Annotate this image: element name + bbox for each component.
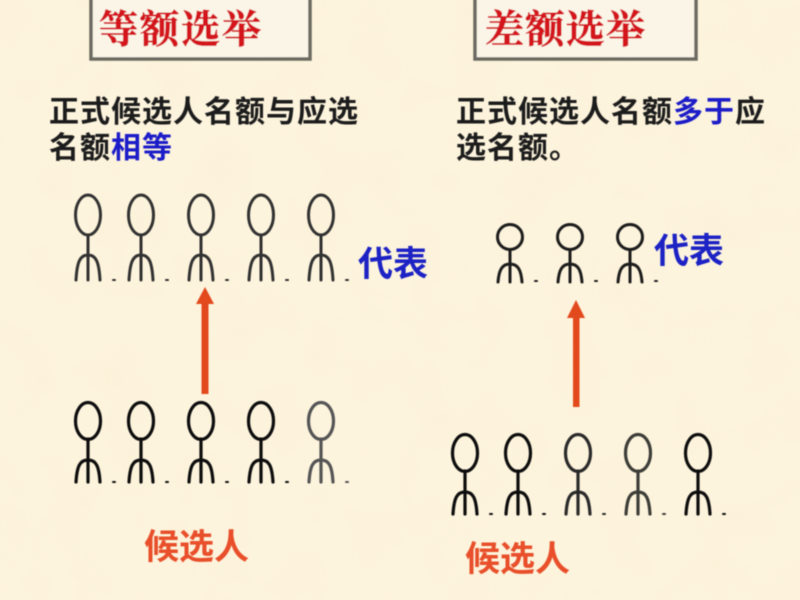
label: 代表: 代表: [358, 245, 428, 284]
arrow: selection upward: [567, 300, 585, 407]
arrow: selection upward: [196, 287, 214, 394]
description text: 正式候选人名额与应选: [49, 96, 359, 129]
heading box: 差额选举: [475, 0, 696, 59]
panel: equal-candidate election: [49, 0, 428, 567]
label: 候选人: 候选人: [465, 540, 570, 579]
figures: representatives: [76, 195, 348, 280]
label: 代表: 代表: [654, 232, 724, 271]
figures: representatives: [498, 224, 657, 282]
description text: 正式候选人名额多于应: [456, 96, 766, 129]
figures: candidates: [452, 434, 725, 514]
description text: 名额相等: [49, 132, 173, 165]
description text: 选名额。: [456, 132, 580, 165]
heading box: 差额选举: 差额选举: [485, 9, 645, 52]
description text: [456, 96, 766, 165]
heading box: 等额选举: [91, 0, 310, 59]
panel: competitive election: [452, 0, 766, 579]
figures: candidates: [76, 402, 348, 482]
description text: [49, 96, 359, 165]
label: 候选人: 候选人: [144, 528, 249, 567]
heading box: 等额选举: 等额选举: [99, 9, 261, 52]
